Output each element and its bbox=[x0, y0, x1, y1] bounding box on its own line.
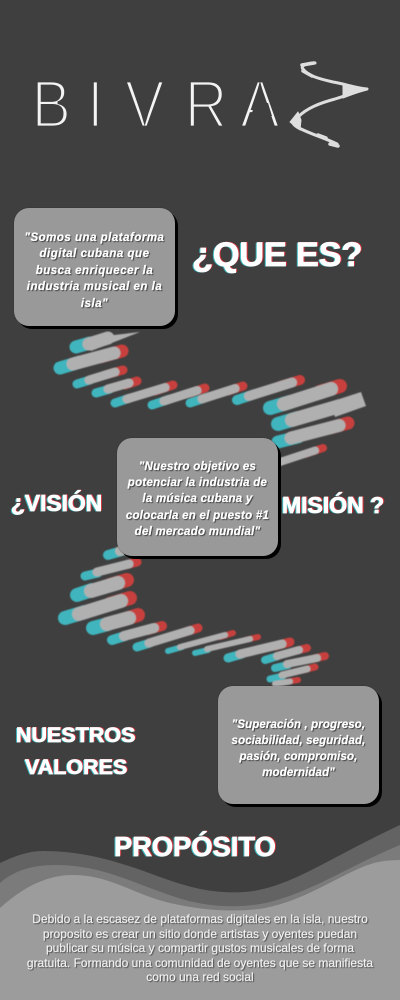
helix bar 14 bbox=[85, 562, 137, 576]
quote text: objetivo: potenciar la industria de bbox=[128, 477, 267, 489]
helix bar 3 bbox=[77, 370, 123, 384]
helix bar 12 bbox=[280, 448, 323, 462]
helix bar 2 bbox=[60, 351, 122, 368]
helix bar 19 bbox=[137, 628, 198, 647]
wordmark: BIVRA bbox=[32, 68, 280, 142]
quote text: objetivo: colocarla en el puesto #1 bbox=[126, 510, 269, 522]
helix bar 20 bbox=[168, 633, 233, 651]
quote text: objetivo: del mercado mundial" bbox=[135, 526, 260, 538]
panel: valores bbox=[218, 686, 379, 804]
heading: nuestros valores bbox=[16, 723, 136, 778]
helix bar 16 bbox=[65, 598, 130, 618]
quote text: que es: isla" bbox=[81, 298, 108, 310]
text block: proposito: gratuita. Formando una comunidad de oyentes que se manifiesta bbox=[27, 956, 373, 970]
heading: vision: ¿VISIÓN bbox=[11, 490, 102, 516]
text block: proposito: Debido a la escasez de plataformas digitales en la isla, nuestro bbox=[32, 912, 368, 926]
panel: objetivo bbox=[117, 438, 278, 556]
quote text: valores: pasión, compromiso, bbox=[240, 751, 357, 763]
quote text: valores: sociabilidad, seguridad, bbox=[232, 735, 365, 747]
helix bar 24 bbox=[275, 656, 325, 668]
helix bar 7 bbox=[190, 386, 243, 403]
text block: proposito: proposito es crear un sitio donde artistas y oyentes puedan bbox=[43, 927, 357, 941]
quote text: que es: industria musical en la bbox=[27, 281, 162, 293]
heading: nuestros valores: VALORES bbox=[25, 754, 127, 778]
quote text: que es: digital cubana que bbox=[40, 248, 149, 260]
quote text: que es: busca enriquecer la bbox=[36, 265, 153, 277]
quote text: objetivo bbox=[126, 460, 270, 538]
text block: proposito: como una red social bbox=[146, 970, 254, 984]
quote text: valores: modernidad" bbox=[262, 767, 335, 779]
helix bar 8 bbox=[237, 380, 300, 400]
helix bar 23 bbox=[265, 648, 307, 660]
icon: squiggle bbox=[290, 63, 367, 146]
helix bar 25 bbox=[270, 667, 315, 679]
heading: proposito: PROPÓSITO bbox=[114, 831, 276, 862]
helix bar 22 bbox=[228, 642, 290, 658]
helix bar 10 bbox=[278, 392, 366, 424]
quote text: objetivo: la música cubana y bbox=[142, 493, 253, 505]
helix bar 6 bbox=[152, 388, 205, 405]
helix bar 9 bbox=[270, 386, 340, 408]
helix bar 18 bbox=[112, 626, 162, 640]
quote text: valores bbox=[232, 718, 366, 779]
heading: que es: ¿QUE ES? bbox=[192, 236, 362, 274]
logo: BIVRA wordmark with squiggle bbox=[32, 61, 368, 148]
helix bar 15 bbox=[77, 580, 127, 595]
quote text: que es bbox=[25, 232, 165, 310]
panel: que es bbox=[14, 208, 175, 326]
helix bar 26 bbox=[275, 680, 298, 684]
quote text: valores: "Superación , progreso, bbox=[232, 719, 365, 731]
heading: mision: MISIÓN ? bbox=[282, 492, 384, 518]
helix bar 5 bbox=[115, 385, 173, 403]
quote text: objetivo: "Nuestro objetivo es bbox=[139, 461, 256, 473]
helix bar 17 bbox=[93, 615, 138, 628]
helix bar 21 bbox=[195, 637, 258, 653]
helix bar 11 bbox=[278, 423, 348, 442]
heading: nuestros valores: NUESTROS bbox=[16, 723, 135, 747]
quote text: que es: "Somos una plataforma bbox=[25, 232, 164, 244]
helix bar 13 bbox=[108, 547, 135, 555]
text block: proposito bbox=[27, 912, 374, 984]
helix bar 1 bbox=[76, 332, 140, 351]
text block: proposito: publicar su música y compartir gustos musicales de forma bbox=[46, 941, 354, 955]
helix bar 4 bbox=[96, 381, 137, 393]
